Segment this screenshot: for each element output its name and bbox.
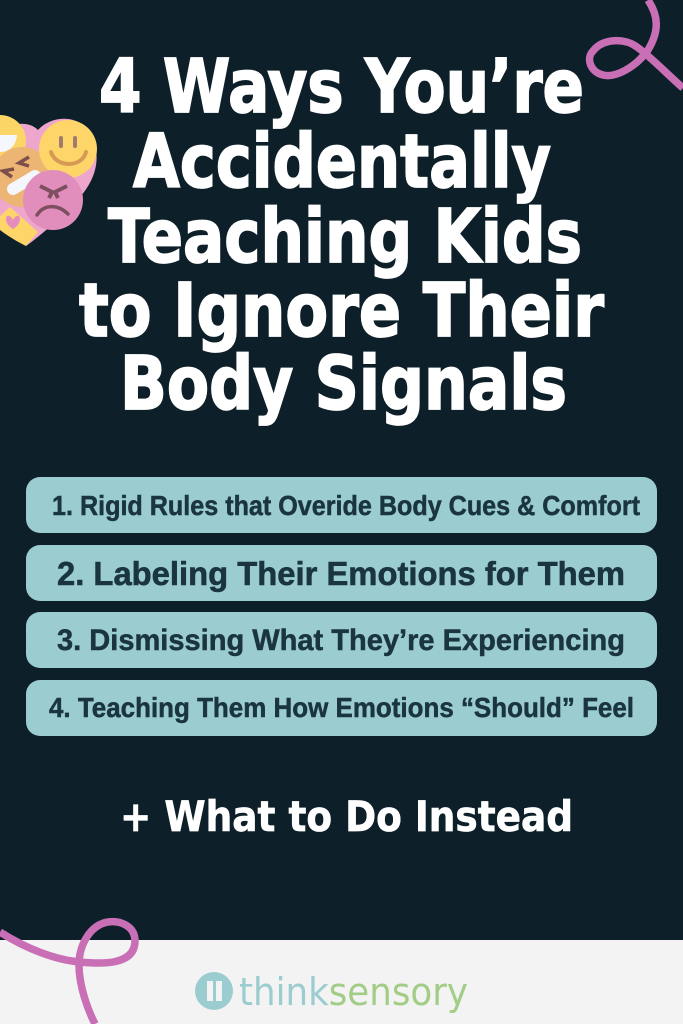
title: 4 Ways You’re — [99, 44, 584, 130]
logo wordmark: thinksensory — [239, 970, 468, 1014]
list item 4: 4. Teaching Them How Emotions “Should” Feel — [49, 692, 634, 723]
subheading: what to do instead: + What to Do Instead — [120, 792, 573, 841]
title: Body Signals — [120, 341, 567, 427]
icon: top-right pink loop ribbon — [590, 0, 683, 88]
icon: emoji heart — [0, 115, 97, 246]
list item 4 — [26, 680, 657, 736]
icon: small pink heart — [6, 216, 20, 229]
icon: bottom-left pink loop ribbon — [0, 922, 135, 1024]
list item 1 — [26, 477, 657, 533]
icon: white-topped emoji — [0, 115, 26, 167]
title: Teaching Kids — [108, 194, 582, 280]
title — [79, 44, 604, 427]
list item 2 — [26, 545, 657, 601]
title: Accidentally — [133, 119, 551, 205]
list item 2: 2. Labeling Their Emotions for Them — [57, 556, 625, 593]
logo: thinksensory — [195, 970, 468, 1014]
footer panel — [0, 940, 683, 1024]
list item 3 — [26, 612, 657, 668]
icon: orange laughing face — [0, 147, 52, 207]
icon: worn yellow card — [0, 207, 38, 246]
list item 3: 3. Dismissing What They’re Experiencing — [57, 624, 625, 657]
logo mark — [195, 972, 233, 1010]
icon: yellow smiling face — [39, 120, 97, 178]
icon: pink angry face — [23, 170, 83, 230]
